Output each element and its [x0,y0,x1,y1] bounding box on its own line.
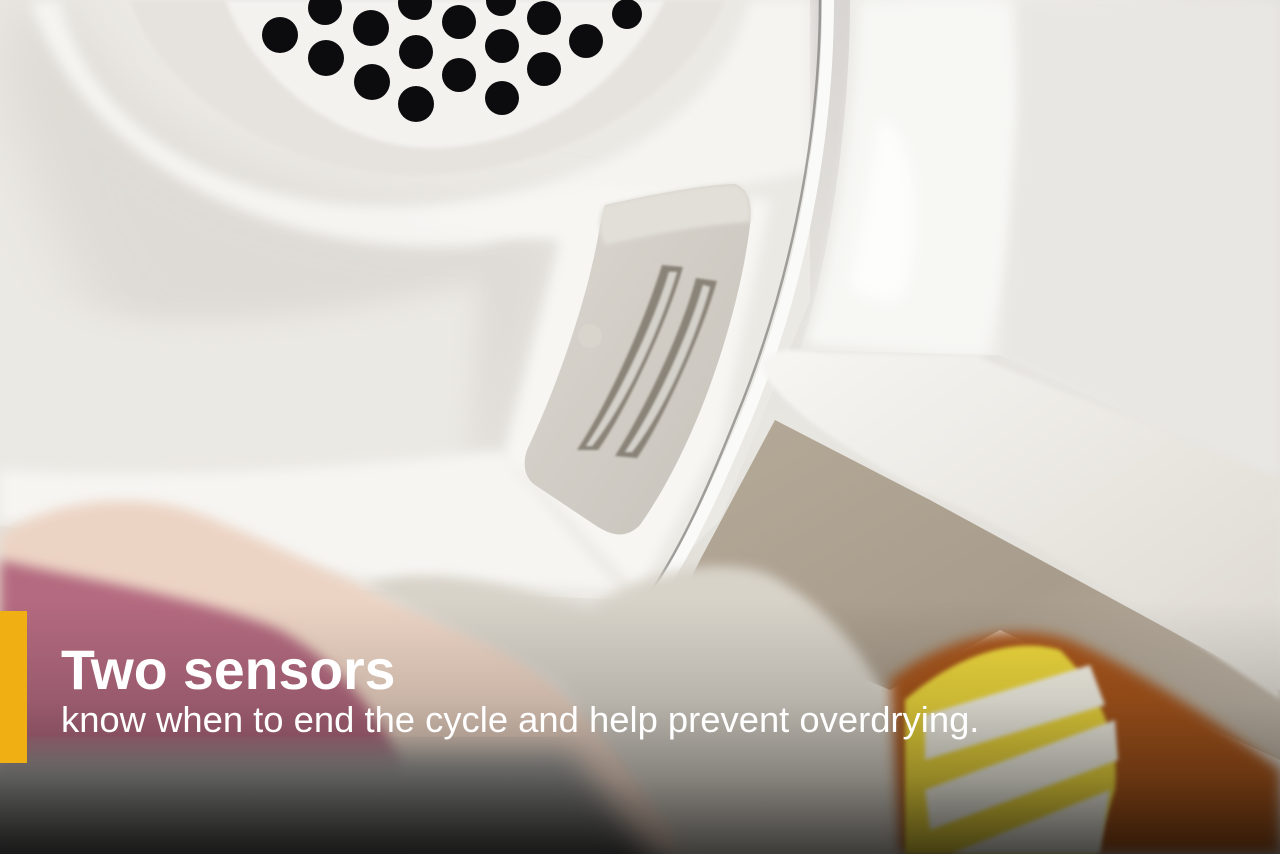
sensor housing [525,184,751,534]
shelf baffle [760,350,1280,700]
lower cavity [680,420,1280,760]
bottom dark gradient [0,600,1280,854]
sensor bar left [577,265,683,450]
clothes: pink fabric [0,560,400,854]
clothes: dark grey fabric [0,750,670,854]
heading: Two sensors [61,639,395,701]
clothes: peach fabric [0,501,680,854]
clothes: orange and yellow striped [890,632,1280,854]
clothes: grey-white fabric [365,566,905,854]
sensor bar right [615,278,717,458]
vent holes [262,0,642,122]
drum back wall [0,0,810,600]
door panel and gasket [652,0,1280,590]
accent bar [0,611,27,763]
subheading: know when to end the cycle and help prevent overdrying. [61,699,979,740]
